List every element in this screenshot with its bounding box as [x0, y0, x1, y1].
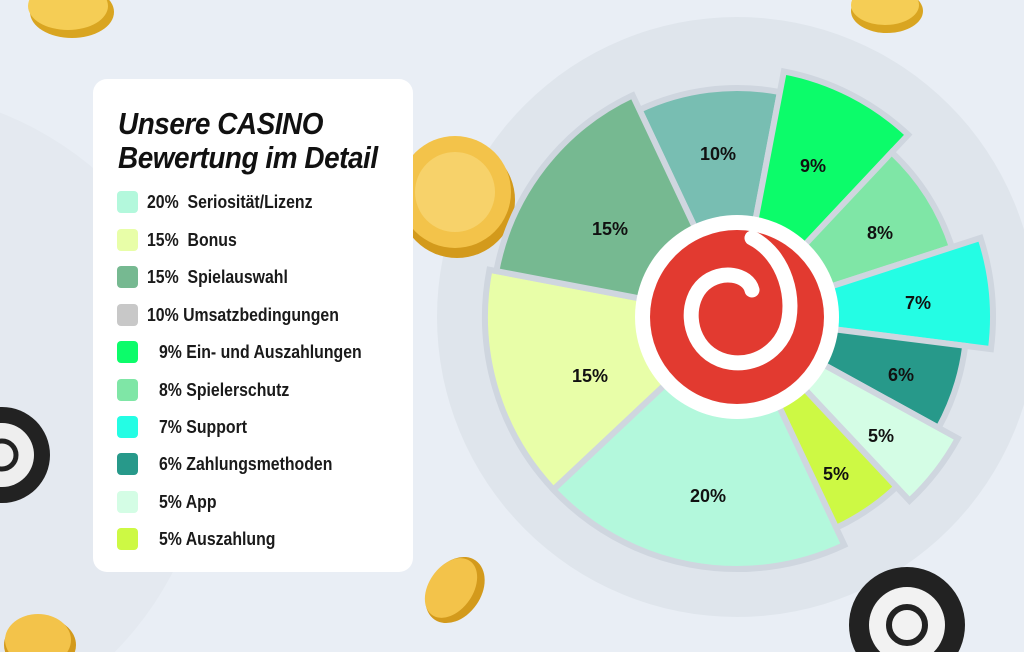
title	[118, 106, 379, 175]
segment labels: 10%	[700, 144, 736, 164]
icon: coin bottom-left	[4, 614, 76, 652]
segment 15% Bonus	[414, 207, 696, 490]
icon: chip bottom-right	[849, 567, 965, 652]
segment 10%	[639, 52, 826, 247]
segment labels: 15%	[592, 219, 628, 239]
legend item: 10% Umsatzbedingungen: 10% Umsatzbedingungen	[147, 305, 339, 325]
legend item: 9% Ein- und Auszahlungen: 9% Ein- und Auszahlungen	[159, 342, 362, 362]
segment 20%	[533, 344, 844, 647]
legend item: 5% Auszahlung	[117, 528, 275, 550]
legend item: 15% Bonus	[117, 229, 237, 251]
segment labels: 6%	[888, 365, 914, 385]
legend item: 20% Seriosität/Lizenz: 20% Seriosität/Lizenz	[147, 192, 312, 212]
segment 8%	[794, 152, 971, 331]
segment 5% Auszahlung	[746, 383, 896, 536]
title: Unsere CASINO	[118, 106, 323, 141]
legend item: 15% Spielauswahl: 15% Spielauswahl	[147, 267, 288, 287]
segment 9%	[752, 71, 915, 263]
segment labels: 5%	[868, 426, 894, 446]
icon: coin top-right	[851, 0, 923, 33]
segment 15% Spielauswahl	[496, 76, 719, 307]
legend item: 5% App	[117, 491, 217, 513]
segment labels: 20%	[690, 486, 726, 506]
legend item: 15% Bonus: 15% Bonus	[147, 230, 237, 250]
legend item: 8% Spielerschutz	[117, 379, 289, 401]
icon: coin bottom	[424, 557, 485, 623]
legend item: 7% Support	[117, 416, 247, 438]
icon: casino logo	[635, 215, 839, 419]
segment labels: 15%	[572, 366, 608, 386]
segment 5% App	[779, 361, 958, 507]
legend item: 7% Support: 7% Support	[159, 417, 247, 437]
segment 6%	[814, 328, 965, 430]
icon: coin middle	[413, 136, 515, 258]
segment labels: 7%	[905, 293, 931, 313]
icon: chip left	[0, 407, 50, 503]
legend item: 5% App: 5% App	[159, 492, 217, 512]
segment 7%	[819, 238, 1014, 394]
legend item: 5% Auszahlung: 5% Auszahlung	[159, 529, 275, 549]
legend item: 6% Zahlungsmethoden: 6% Zahlungsmethoden	[159, 454, 332, 474]
segment labels: 8%	[867, 223, 893, 243]
segment labels: 9%	[800, 156, 826, 176]
legend item: 8% Spielerschutz: 8% Spielerschutz	[159, 380, 289, 400]
title: Bewertung im Detail	[118, 140, 378, 175]
segment labels: 5%	[823, 464, 849, 484]
segment labels	[572, 144, 931, 506]
icon: coin top-left	[28, 0, 114, 38]
panel: legend	[93, 79, 413, 572]
